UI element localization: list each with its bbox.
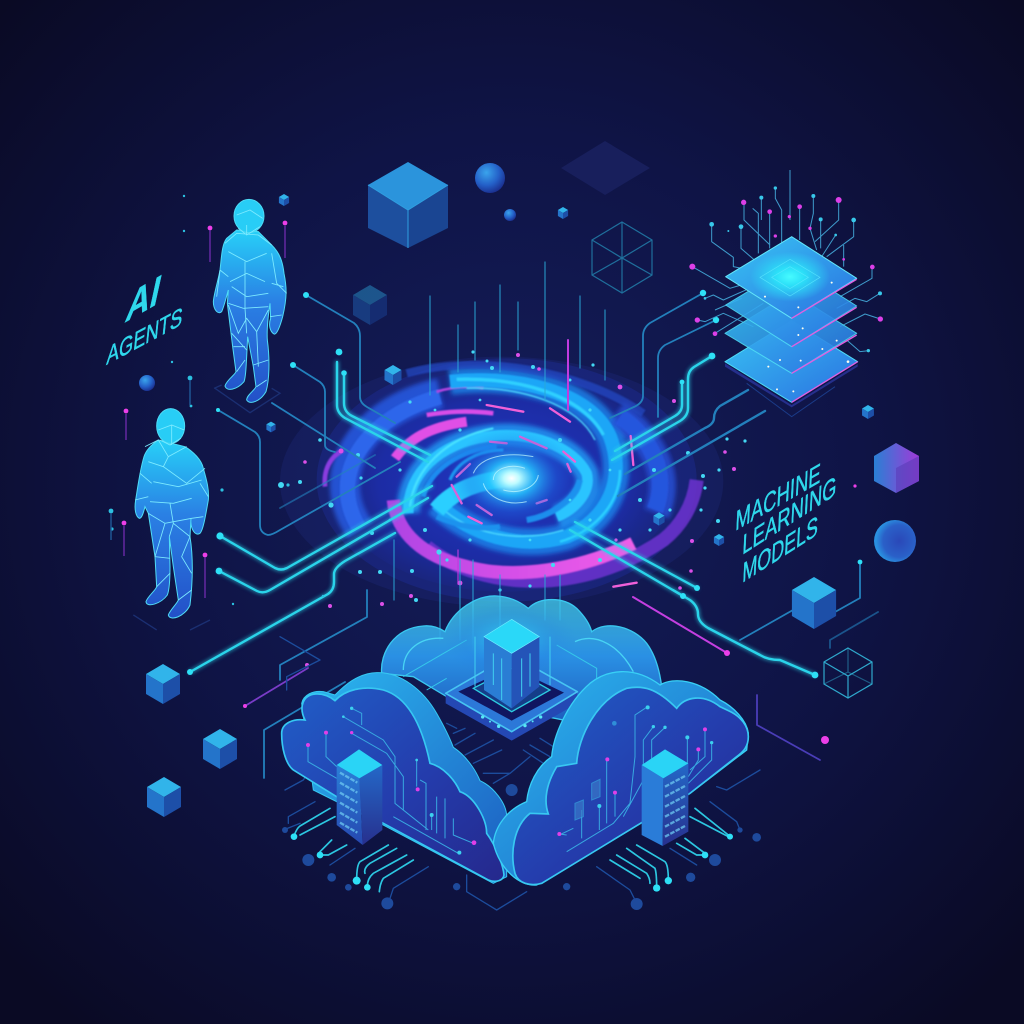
back cloud [382, 596, 662, 730]
human figure: upper agent [213, 199, 287, 413]
sphere left [139, 375, 155, 391]
bottom circuit board traces [280, 637, 761, 910]
right server rack [642, 749, 688, 846]
cube: large translucent [368, 162, 448, 248]
central chip platform [446, 655, 577, 741]
galaxy swirl [280, 357, 723, 607]
small cube top centre [558, 207, 568, 219]
particles around swirl [278, 350, 747, 602]
cloud computing cluster [282, 596, 748, 885]
right cube [792, 577, 836, 629]
stacked neural layers [689, 170, 883, 417]
right cloud circuitry [559, 707, 712, 852]
shadow outline [747, 383, 835, 417]
circuit lines to swirl [190, 262, 878, 778]
small cube in swirl [653, 512, 665, 526]
small right cube [862, 405, 874, 419]
left cloud circuitry [308, 708, 473, 853]
dim right traces [610, 293, 878, 760]
dim left traces [218, 295, 400, 778]
left cloud [282, 673, 507, 883]
purple hexagon [874, 443, 919, 493]
left circuit traces [190, 362, 432, 672]
right cloud [493, 672, 748, 885]
MODELS: MODELS [742, 509, 819, 589]
small cube top left [279, 194, 289, 206]
right circuit traces [570, 356, 815, 675]
cube near swirl [384, 365, 402, 385]
label: Machine Learning Models [735, 457, 837, 589]
central server cube [475, 619, 550, 708]
layer 4 [725, 321, 858, 407]
small sphere [504, 209, 516, 221]
AGENTS: AGENTS [105, 301, 184, 371]
AI: AI [122, 266, 166, 333]
label: AI Agents [105, 266, 184, 371]
sphere right [874, 520, 916, 562]
small cube by label [714, 534, 724, 546]
human figure: lower agent [133, 409, 210, 630]
sphere top [475, 163, 505, 193]
MACHINE: MACHINE [735, 457, 822, 537]
line end nodes [109, 195, 862, 744]
magenta trace [633, 597, 727, 653]
left server rack [337, 749, 382, 845]
lower left cube 3 [147, 777, 181, 817]
lower left cube 2 [203, 729, 237, 769]
layer 1 [726, 237, 857, 318]
flat dark diamond [561, 141, 650, 195]
wire fan [692, 170, 880, 352]
layer 3 [725, 293, 857, 373]
small teal cube [266, 422, 276, 432]
lower left cube 1 [146, 664, 180, 704]
LEARNING: LEARNING [742, 470, 837, 561]
wire cube top [592, 222, 652, 293]
dark cube [353, 285, 387, 325]
vertical beams [394, 262, 605, 650]
wire cube right [824, 648, 872, 698]
layer 2 [726, 265, 857, 347]
